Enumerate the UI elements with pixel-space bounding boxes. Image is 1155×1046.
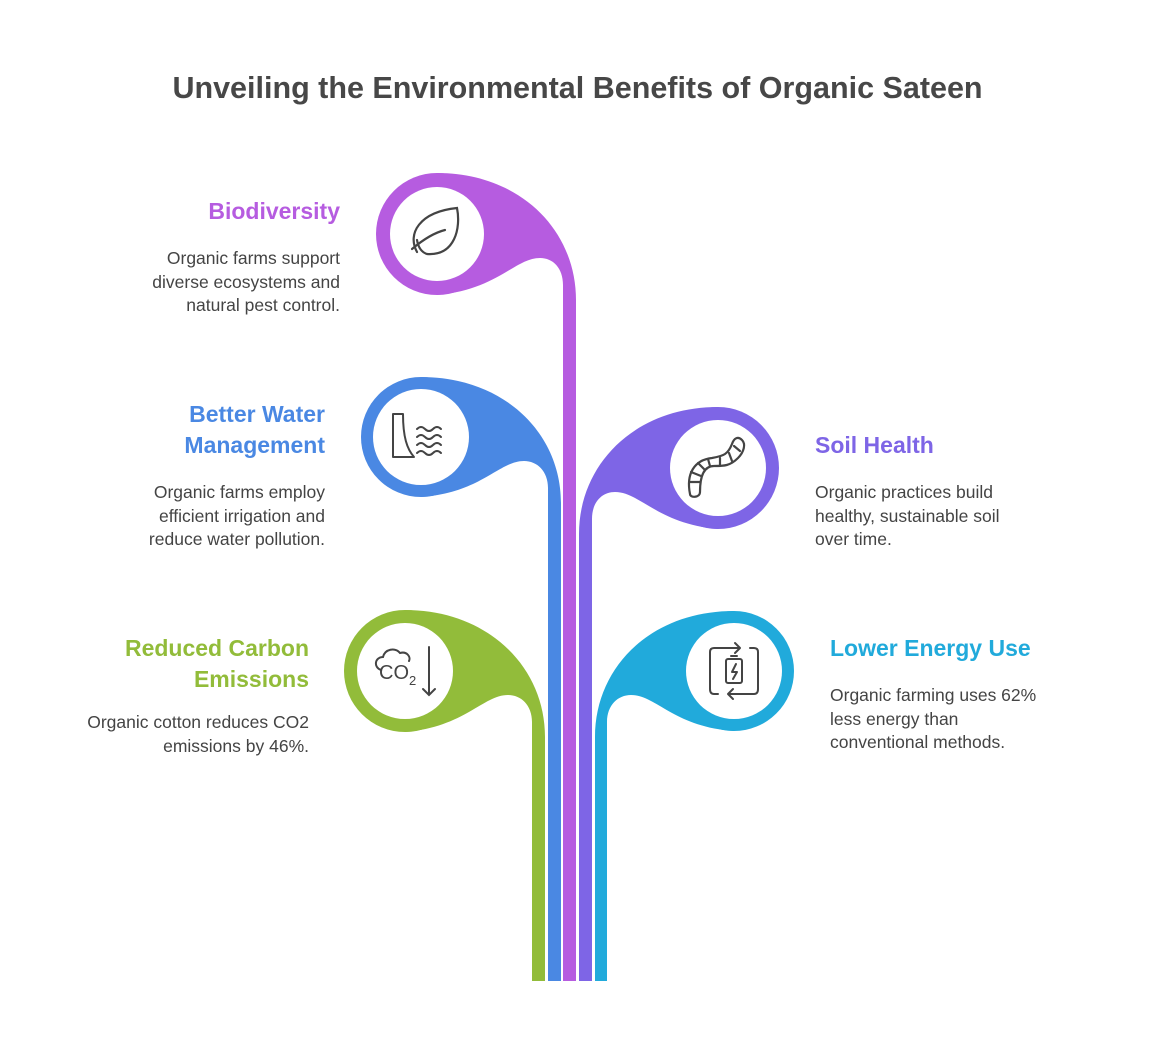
text: carbon: Organic cotton reduces CO2	[87, 712, 309, 732]
leaf: water	[361, 377, 561, 981]
text: soil: Organic practices build	[815, 482, 993, 502]
text: energy: conventional methods.	[830, 732, 1005, 752]
icon: co2 down	[376, 647, 435, 695]
text: carbon: Reduced Carbon	[125, 635, 309, 661]
text: carbon: emissions by 46%.	[163, 736, 309, 756]
leaf: carbon	[344, 610, 545, 981]
text: energy: Organic farming uses 62%	[830, 685, 1036, 705]
text: water	[149, 401, 325, 549]
text: water: Organic farms employ	[154, 482, 325, 502]
icon: worm	[689, 438, 744, 497]
text: water: Management	[184, 432, 325, 458]
text: biodiversity: Biodiversity	[208, 198, 340, 224]
text: biodiversity	[152, 198, 340, 315]
text: water: efficient irrigation and	[159, 506, 325, 526]
text: biodiversity: diverse ecosystems and	[152, 272, 340, 292]
text: energy: Lower Energy Use	[830, 635, 1031, 661]
icon: battery cycle	[710, 643, 758, 699]
icon: leaf	[412, 208, 458, 254]
text: soil: over time.	[815, 529, 892, 549]
text: water: reduce water pollution.	[149, 529, 325, 549]
text: carbon	[87, 635, 309, 756]
text: energy: less energy than	[830, 708, 958, 728]
text: water: Better Water	[189, 401, 325, 427]
icon: dam and water	[393, 414, 441, 457]
leaf: energy	[595, 611, 794, 981]
text: soil	[815, 432, 1000, 549]
leaf: carbon: CO	[379, 662, 409, 684]
leaf: carbon: 2	[409, 673, 416, 688]
leaf: soil	[579, 407, 779, 981]
text: soil: healthy, sustainable soil	[815, 506, 1000, 526]
leaf: biodiversity	[376, 173, 576, 981]
text: soil: Soil Health	[815, 432, 934, 458]
text: energy	[830, 635, 1036, 752]
title: Unveiling the Environmental Benefits of Organic Sateen	[172, 71, 983, 105]
text: carbon: Emissions	[194, 666, 309, 692]
text: biodiversity: Organic farms support	[167, 248, 340, 268]
text: biodiversity: natural pest control.	[186, 295, 340, 315]
